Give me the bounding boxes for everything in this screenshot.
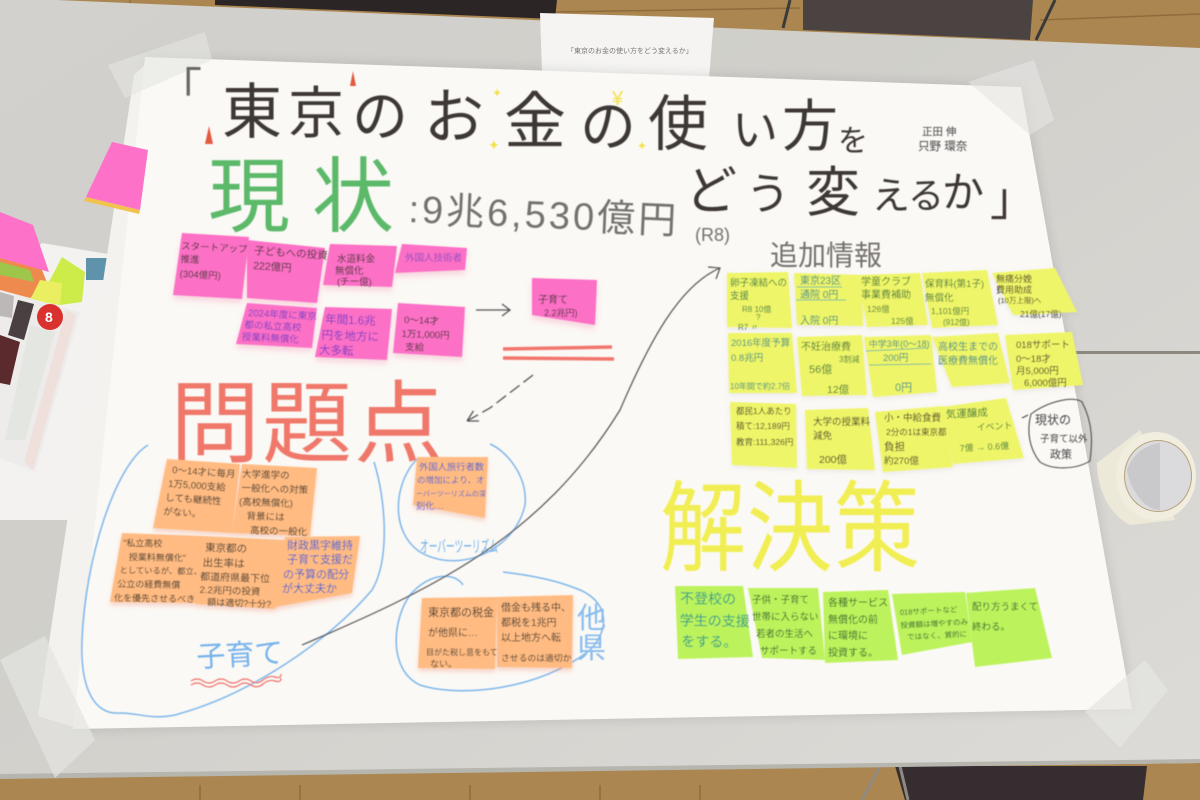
arrow to childcare (476, 304, 510, 316)
note: overtourism: ーバーツーリズムの深 (416, 489, 486, 498)
note: debt: 以上地方へ転 (501, 631, 561, 644)
note: 018 support: 018サポート (1016, 340, 1070, 351)
note: debt: 都税を1兆円 (501, 616, 557, 629)
note: fertility: 不妊治療費 (801, 342, 851, 353)
title line 1: 金 (504, 88, 566, 157)
title decorations (205, 71, 647, 153)
note: school lunch: 小・中給食費 (884, 413, 941, 424)
note: debt (497, 595, 573, 668)
note: school club (858, 273, 928, 327)
note: medical free: 医療費無償化 (938, 354, 998, 367)
note: momentum event (942, 398, 1024, 464)
note: egg freezing: R7 〃 (738, 323, 758, 332)
marker package (0, 290, 80, 472)
place card (540, 13, 714, 78)
long arrow to additional info (302, 267, 720, 645)
current budget: :9兆6,530億円 (408, 189, 680, 243)
note: childcare total: 2.2兆円) (544, 308, 578, 318)
note: momentum event: 気運醸成 (946, 407, 988, 421)
note: no continuity: しても継続性 (165, 492, 222, 508)
note: transfer: 大多転 (319, 343, 354, 358)
heading: problems: 問題点 (170, 375, 446, 475)
tape roll (1097, 430, 1196, 525)
sticky note: table pink (84, 142, 148, 214)
title line 2: か (942, 169, 984, 216)
note: budget 2016: 10年間で約2.7倍 (730, 381, 790, 391)
equals sign (503, 347, 614, 359)
note: school lunch: 2分の1は東京都 (886, 427, 947, 437)
blue circle: childcare (82, 445, 384, 717)
title line 1 (158, 65, 868, 158)
note: birth rate: 額は適切?十分? (207, 596, 271, 609)
title line 1: の (352, 85, 408, 148)
note: fertility: 12億 (827, 383, 850, 396)
note: tuition: 授業料無償化 (242, 331, 300, 346)
note: university fees: 200億 (819, 453, 848, 466)
note: environment: 各種サービス (828, 598, 888, 609)
note: birth rate: 東京都の (205, 542, 247, 555)
note: 018 support (1005, 332, 1083, 390)
note: youth: 世帯に入らない (752, 611, 819, 623)
title line 1: 東 (222, 79, 282, 146)
note: per capita: 都民1人あたり (736, 406, 792, 416)
note: middle school: 200円 (883, 353, 908, 364)
note: university: 背景には (246, 510, 285, 524)
note: university: 大学進学の (242, 469, 290, 482)
note: 018 rethink: 投資額は増やすのみ (900, 616, 969, 630)
title line 1: 京 (288, 82, 344, 145)
note: overtourism: の増加により、オ (417, 475, 484, 485)
note: private high school: "私立高校 (123, 538, 162, 549)
note: egg freezing: 支援 (730, 290, 750, 302)
note: truancy support: をする。 (681, 633, 737, 650)
note: youth: サポートする (760, 646, 817, 657)
note: allowance: 0～14才 (404, 315, 439, 327)
note: nursery (922, 270, 998, 328)
note: no continuity: 1万5,000支給 (168, 478, 227, 494)
title line 2: え (872, 176, 910, 218)
note: university: (高校無償化) (239, 496, 293, 510)
note: startup: 推進 (180, 253, 200, 266)
note: 23 wards: 入院 0円 (800, 315, 838, 327)
note: tax: 目がた税し意をもて (426, 647, 498, 657)
note: water: (チー億) (337, 276, 372, 288)
blue circle: other prefectures (396, 572, 604, 691)
note: tax (418, 597, 498, 669)
note: nursery: 保育料(第1子) (925, 279, 984, 290)
note: 23 wards: 通院 0円 (800, 289, 838, 301)
note: finance: 財政黒字維持 (287, 540, 353, 552)
note: foreigners: 外国人技術者 (405, 252, 462, 264)
note: startup: (304億円) (179, 268, 221, 282)
heading: current state: 状 (312, 152, 394, 243)
note: egg freezing (727, 272, 792, 332)
note: 018 rethink: 018サポートなど (900, 605, 958, 617)
note: 018 rethink: ではなく、質的に (907, 629, 967, 642)
note: 018 support: 6,000億円 (1024, 377, 1067, 389)
note: startup (173, 233, 249, 299)
note: school lunch: 負担 (884, 441, 905, 453)
papers at left (0, 243, 120, 520)
title line 2: 」 (990, 173, 1036, 225)
title line 1: い (732, 104, 778, 156)
note: medical free: 高校生までの (938, 342, 998, 353)
note: 23 wards (794, 273, 863, 327)
note: school lunch (875, 406, 953, 472)
title line 1: お (424, 84, 484, 151)
note: private high school: 公立の経費無償 (117, 578, 180, 590)
note: birth rate: 出生率は (202, 556, 245, 570)
note: painless delivery: 無痛分娩 (996, 274, 1032, 284)
bubble: current childcare policy: 子育て以外 (1040, 433, 1088, 445)
note: distribution: 配り方うまくて (972, 602, 1038, 613)
red wavy underline (191, 674, 281, 687)
note: distribution (966, 588, 1052, 667)
note: environment (823, 590, 898, 663)
note: debt: 借金も残る中、 (501, 603, 571, 614)
note: medical free (932, 333, 1010, 387)
note: transfer: 円を地方に (321, 328, 379, 344)
note: no continuity: 0～14才に毎月 (172, 465, 236, 480)
note: momentum event: イベント (976, 421, 1013, 432)
note: middle school (864, 335, 937, 397)
note: overtourism: 刻化… (416, 501, 444, 511)
note: painless delivery (992, 268, 1077, 319)
note: budget 2016: 2016年度予算 (731, 338, 790, 349)
note: university (232, 464, 317, 538)
note: children (247, 240, 329, 303)
note: no continuity (153, 459, 240, 533)
note: water (323, 244, 397, 288)
note: truancy support: 学生の支援 (680, 612, 750, 629)
note: water: 無償化 (335, 265, 364, 277)
note: children: 222億円 (253, 259, 292, 275)
note: youth: 子供・子育て (752, 595, 809, 606)
note: per capita: 教育:111,326円 (736, 437, 793, 447)
title line 1: を (838, 125, 868, 158)
note: private high school (110, 533, 203, 604)
label: other prefectures: 他 (577, 603, 606, 635)
crumpled notes (0, 257, 85, 305)
blue circle: overtourism (398, 444, 525, 561)
note: no continuity: がない。 (163, 506, 202, 520)
authors: 正田 伸 (922, 126, 956, 138)
note: egg freezing: 卵子凍結への (730, 278, 787, 289)
note: transfer: 年間1.6兆 (325, 314, 376, 328)
note: private high school: 授業料無償化" (129, 551, 186, 563)
note: fertility: 3割減 (839, 354, 859, 364)
label: overtourism: オーバーツーリズム (420, 538, 498, 556)
orange notes (110, 457, 573, 669)
note: allowance (393, 303, 465, 357)
bubble: current childcare policy (1022, 399, 1092, 468)
title decorations: ✦ (488, 137, 500, 153)
note: university fees (805, 408, 875, 470)
note: finance (275, 536, 360, 607)
note: painless delivery: (10万上限)へ (998, 296, 1042, 305)
note: private high school: としているが、都立、 (119, 565, 202, 576)
current budget: (R8) (695, 225, 730, 245)
note: truancy support (675, 586, 753, 659)
note: university fees: 大学の授業料 (813, 417, 870, 428)
title line 2: う (746, 170, 790, 219)
note: painless delivery: 費用助成 (996, 284, 1032, 295)
title line 1: 使 (648, 91, 708, 158)
note: startup: スタートアップ (181, 241, 248, 255)
note: 018 rethink (892, 592, 972, 655)
note: foreigners (395, 244, 467, 273)
pink notes (173, 233, 597, 360)
note: painless delivery: 21億(17億) (1020, 309, 1062, 319)
note: tuition: 都の私立高校 (244, 319, 302, 334)
note: fertility: 56億 (809, 363, 832, 376)
note: allowance: 支給 (405, 341, 425, 354)
note: birth rate (195, 536, 285, 609)
note: school lunch: 約270億 (884, 455, 919, 467)
green notes (675, 586, 1052, 667)
note: nursery: 無償化 (925, 292, 954, 304)
title line 2: る (908, 175, 944, 216)
title line 2 (685, 163, 1036, 225)
note: school club: 学童クラブ (861, 277, 911, 288)
note: environment: 無償化の前 (828, 613, 878, 626)
note: youth (748, 588, 825, 660)
note: school club: 125億 (891, 316, 914, 326)
note: finance: の予算の配分 (283, 567, 349, 581)
note: per capita (730, 402, 797, 468)
title line 1: 方 (782, 95, 838, 158)
note: per capita: 積て:12,189円 (736, 421, 790, 431)
note: 23 wards: 東京23区 (800, 276, 841, 287)
note: university: 高校の一般化 (250, 524, 308, 538)
note: egg freezing: ? (756, 313, 761, 322)
dashed arrow to problems (467, 375, 533, 421)
note: 018 support: 月5,000円 (1016, 366, 1059, 377)
note: allowance: 1万1,000円 (401, 329, 450, 342)
place card: 「東京のお金の使い方をどう変えるか」 (567, 46, 693, 55)
note: finance: 子育て支援だ (287, 552, 353, 566)
authors: 只野 環奈 (918, 139, 968, 153)
title decorations: ¥ (611, 88, 624, 110)
marker package: 8 (45, 309, 53, 325)
title line 1: の (580, 95, 636, 158)
note: debt: させるのは適切か (501, 652, 572, 663)
note: overtourism: 外国人旅行者数 (419, 462, 484, 472)
title line 2: ど (685, 163, 737, 221)
note: fertility (797, 335, 867, 396)
note: childcare total (532, 278, 597, 325)
note: overtourism (413, 457, 488, 518)
title decorations: ✦ (637, 139, 647, 153)
label: childcare: 子育て (196, 636, 284, 674)
note: water: 水道料金 (337, 254, 375, 265)
heading: solutions: 解決策 (660, 473, 921, 584)
note: school club: 事業費補助 (861, 288, 911, 301)
note: birth rate: 都道府県最下位 (200, 570, 270, 585)
note: university fees: 減免 (813, 430, 833, 442)
note: egg freezing: R8 10億 (742, 304, 771, 314)
note: finance: が大丈夫か (282, 581, 337, 595)
note: birth rate: 2.2兆円の投資 (199, 584, 261, 598)
note: middle school: 中学3年(0～18) (869, 339, 930, 349)
note: nursery: 1,101億円 (931, 306, 969, 316)
note: truancy support: 不登校の (680, 590, 736, 607)
title line 1: 「 (158, 65, 202, 114)
heading: additional info: 追加情報 (770, 240, 882, 271)
note: tax: 東京都の税金 (428, 607, 494, 619)
note: distribution: 終わる。 (972, 621, 1010, 633)
note: transfer (315, 307, 392, 360)
label: other prefectures: 県 (577, 633, 606, 665)
note: children: 子どもへの投資 (254, 245, 328, 262)
note: budget 2016 (728, 333, 797, 393)
note: school club: 126億 (867, 304, 890, 314)
note: tuition: 2024年度に東京 (248, 308, 317, 323)
bubble: current childcare policy: 政策 (1050, 447, 1072, 461)
note: youth: 若者の生活へ (756, 628, 814, 640)
note: private high school: 化を優先させるべき (114, 592, 195, 604)
chairs (215, 0, 1147, 800)
note: 018 support: 0～18才 (1016, 353, 1051, 365)
authors (918, 126, 968, 153)
bubble: current childcare policy: 現状の (1035, 413, 1071, 427)
title decorations: ✦ (492, 86, 502, 100)
note: budget 2016: 0.8兆円 (731, 353, 763, 364)
yellow notes (727, 268, 1083, 472)
note: nursery: (912億) (943, 317, 970, 327)
note: middle school: 0円 (895, 382, 912, 394)
sticky note: table pink 2 (0, 212, 49, 272)
note: childcare total: 子育て (538, 295, 568, 306)
note: tax: が他県に… (428, 626, 478, 639)
note: momentum event: 7億 → 0.6億 (959, 440, 1009, 453)
title line 2: 変 (806, 163, 860, 223)
note: university: 一般化への対策 (241, 482, 309, 496)
note: environment: 投資する。 (828, 646, 878, 659)
note: tuition (236, 303, 317, 348)
note: tax: ない。 (430, 659, 457, 669)
heading: current state: 現 (208, 152, 290, 243)
note: environment: に環境に (828, 630, 868, 642)
